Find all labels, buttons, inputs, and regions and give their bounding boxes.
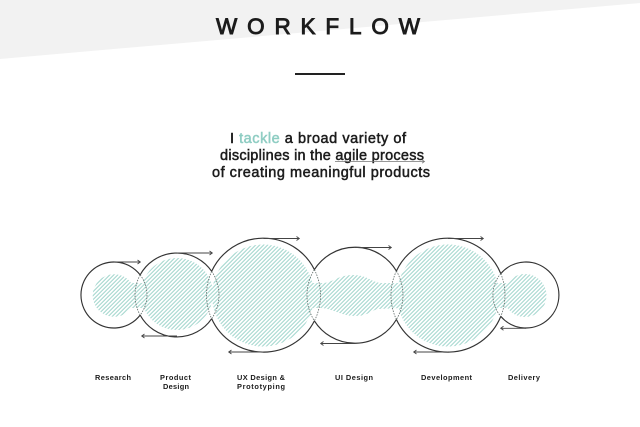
intro text block [212,131,430,181]
circle: Research [81,260,147,328]
label: UX Design and Prototyping: UX Design & [237,373,286,382]
hatched workload area [90,240,550,350]
workflow diagram [81,236,559,354]
label: UI Design: UI Design [335,373,373,382]
label: Product Design: Product [160,373,192,382]
label: Product Design [160,373,192,391]
circle: UX Design and Prototyping [207,236,320,354]
intro text block: disciplines in the agile process [220,148,424,164]
intro text block: I tackle a broad variety of [230,131,407,147]
label: UX Design and Prototyping [237,373,286,391]
title: WORKFLOW [216,14,421,39]
intro text block: of creating meaningful products [212,165,430,181]
label: Development: Development [421,373,473,382]
circle: UI Design [307,246,403,346]
stage labels [95,373,541,391]
label: Product Design: Design [163,382,189,391]
background: grey slanted band [0,0,640,59]
label: UX Design and Prototyping: Prototyping [237,382,285,391]
circle: Product Design [135,251,219,338]
circle: Delivery [493,262,559,330]
label: Research: Research [95,373,131,382]
circle: Development [391,236,505,354]
label: Delivery: Delivery [508,373,541,382]
title rule [295,73,345,75]
underline arrow: agile process [335,160,424,163]
